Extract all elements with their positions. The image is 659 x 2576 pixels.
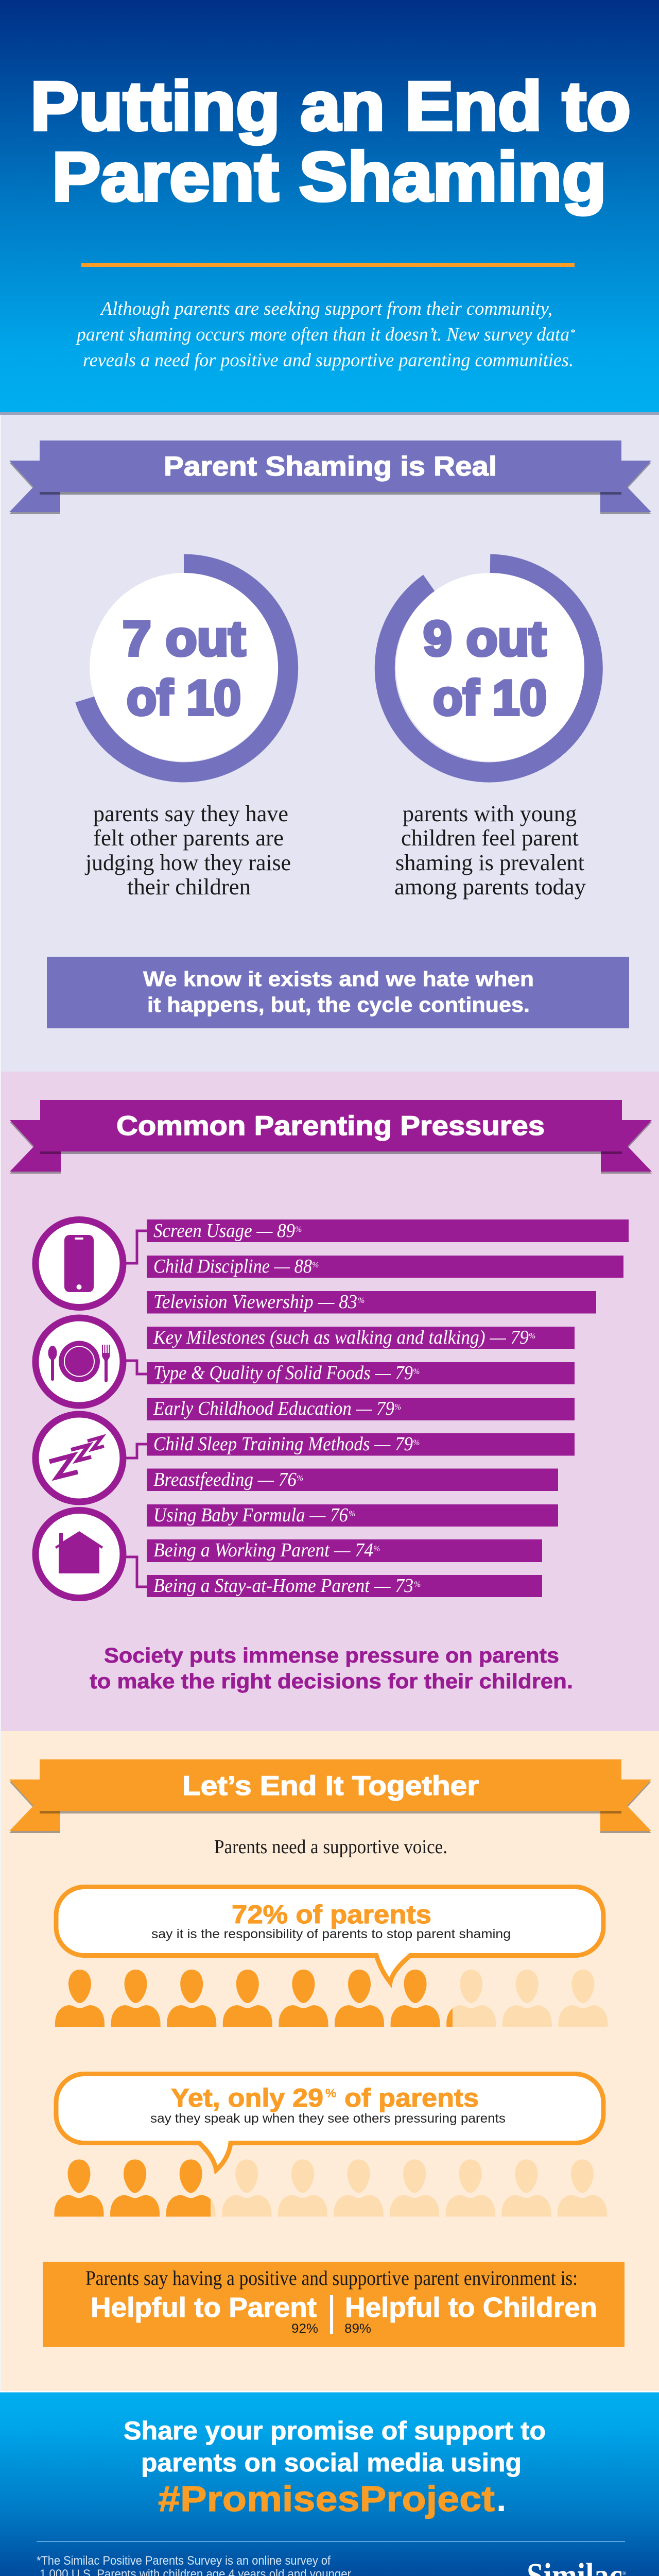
intro text: reveals a need for positive and supportive parenting communities. bbox=[83, 350, 574, 371]
speech bubble: 29% of parents: of parents bbox=[344, 2083, 479, 2112]
intro text: * bbox=[570, 327, 575, 338]
pictogram: 29 percent of parents bbox=[55, 2160, 607, 2216]
bar chart: parenting pressures bbox=[147, 1219, 629, 1597]
speech bubble: 72% of parents bbox=[56, 1887, 603, 1982]
bar: television viewership: % bbox=[358, 1296, 365, 1305]
bar: key milestones: % bbox=[529, 1332, 535, 1341]
text: pressure statement: Society puts immense pressure on parents bbox=[104, 1643, 559, 1667]
speech bubble: 29% of parents: Yet, only 29 bbox=[171, 2083, 323, 2112]
speech bubble: 72% of parents: 72% of parents bbox=[232, 1900, 431, 1929]
bar: baby formula: % bbox=[349, 1510, 355, 1518]
speech bubble: 29% of parents: % bbox=[325, 2087, 336, 2100]
bar: breastfeeding: % bbox=[297, 1474, 303, 1483]
panel: header bbox=[0, 0, 659, 412]
icon: plate and cutlery bbox=[36, 1318, 123, 1405]
bar: breastfeeding: Breastfeeding — 76 bbox=[153, 1469, 297, 1490]
text: 7 out of 10 caption: judging how they raise bbox=[84, 850, 291, 875]
bar: sleep training: % bbox=[413, 1438, 420, 1447]
speech bubble: 72% of parents: say it is the responsibility of parents to stop parent shaming bbox=[151, 1927, 511, 1941]
text: 9 out of 10 caption: among parents today bbox=[394, 874, 586, 900]
text: share your promise bbox=[124, 2416, 546, 2477]
bar: baby formula bbox=[147, 1504, 558, 1527]
donut chart: 9 out of 10: of 10 bbox=[433, 670, 547, 725]
bar: working parent: % bbox=[373, 1545, 380, 1553]
callout banner: We know it exists and we hate when bbox=[143, 967, 534, 991]
donut chart: 9 out of 10: 9 out bbox=[423, 611, 546, 666]
panel: footer call to action bbox=[0, 2391, 659, 2576]
bar: child discipline: Child Discipline — 88 bbox=[153, 1256, 312, 1277]
callout banner: it happens, but, the cycle continues. bbox=[147, 993, 530, 1016]
speech bubble: 29% of parents: say they speak up when they see others pressuring parents bbox=[150, 2111, 506, 2126]
icon: sleep zzz bbox=[36, 1414, 123, 1502]
hashtag: #PromisesProject bbox=[158, 2479, 495, 2519]
bar: sleep training: Child Sleep Training Methods — 79 bbox=[153, 1433, 413, 1455]
bar: sleep training bbox=[147, 1433, 575, 1456]
ribbon heading: common parenting pressures bbox=[10, 1100, 652, 1174]
text: 9 out of 10 caption bbox=[394, 801, 586, 900]
ribbon heading: let's end it together: Let’s End It Together bbox=[182, 1771, 479, 1801]
footnote: *The Similac Positive Parents Survey is an online survey of bbox=[37, 2554, 331, 2568]
callout: helpful to parent and children bbox=[43, 2262, 625, 2347]
bar: baby formula: Using Baby Formula — 76 bbox=[153, 1504, 348, 1526]
title: Parent Shaming bbox=[52, 139, 606, 215]
bar: breastfeeding bbox=[147, 1468, 558, 1491]
donut chart: 7 out of 10 bbox=[85, 564, 288, 772]
callout banner bbox=[47, 957, 629, 1028]
bar: stay-at-home parent: Being a Stay-at-Home Parent — 73 bbox=[153, 1575, 413, 1597]
bar: working parent bbox=[147, 1539, 542, 1562]
donut chart: 7 out of 10: of 10 bbox=[127, 670, 241, 725]
bar: stay-at-home parent: % bbox=[414, 1580, 421, 1589]
ribbon heading: parent shaming is real bbox=[9, 440, 651, 514]
callout: helpful to parent and children: 92% bbox=[291, 2321, 318, 2336]
text: supportive voice: Parents need a supportive voice. bbox=[214, 1836, 447, 1858]
footnote bbox=[37, 2554, 351, 2576]
panel: parent shaming is real bbox=[0, 412, 659, 2391]
callout: helpful to parent and children: 89% bbox=[344, 2321, 371, 2336]
text: pressure statement: to make the right decisions for their children. bbox=[90, 1669, 573, 1693]
bar: screen usage bbox=[147, 1219, 629, 1242]
pictogram: 72 percent of parents bbox=[55, 1970, 608, 2027]
bar: solid foods: Type & Quality of Solid Foods — 79 bbox=[153, 1362, 413, 1384]
intro text bbox=[75, 298, 575, 371]
panel: common parenting pressures bbox=[1, 1072, 659, 1731]
bar: screen usage: % bbox=[295, 1225, 302, 1234]
bar: early childhood education bbox=[147, 1398, 575, 1420]
ribbon heading: common parenting pressures: Common Parenting Pressures bbox=[116, 1111, 545, 1141]
bar: early childhood education: Early Childhood Education — 79 bbox=[153, 1398, 394, 1419]
text: pressure statement bbox=[90, 1643, 573, 1693]
callout: helpful to parent and children: Helpful to Children bbox=[345, 2292, 597, 2323]
hashtag: . bbox=[496, 2479, 506, 2519]
text: 7 out of 10 caption bbox=[84, 801, 291, 900]
donut chart: 9 out of 10 bbox=[385, 564, 593, 772]
bar: child discipline bbox=[147, 1256, 623, 1278]
orange divider bbox=[81, 263, 575, 267]
text: 7 out of 10 caption: felt other parents are bbox=[93, 825, 284, 851]
text: 7 out of 10 caption: their children bbox=[127, 874, 251, 900]
bar: child discipline: % bbox=[312, 1261, 319, 1269]
bar: screen usage: Screen Usage — 89 bbox=[153, 1220, 295, 1242]
callout: helpful to parent and children: Parents say having a positive and supportive parent environment is: bbox=[85, 2266, 578, 2290]
callout: helpful to parent and children: Helpful to Parent bbox=[91, 2292, 317, 2323]
text: 9 out of 10 caption: parents with young bbox=[403, 801, 577, 826]
icon: house bbox=[36, 1511, 123, 1598]
bar: early childhood education: % bbox=[394, 1403, 401, 1412]
bar: working parent: Being a Working Parent — 74 bbox=[153, 1539, 373, 1561]
bar: solid foods bbox=[147, 1362, 575, 1384]
ribbon heading: let's end it together bbox=[9, 1759, 651, 1833]
title bbox=[30, 68, 631, 215]
bar: television viewership: Television Viewership — 83 bbox=[153, 1291, 357, 1313]
ribbon heading: parent shaming is real: Parent Shaming is Real bbox=[164, 451, 497, 482]
intro text: parent shaming occurs more often than it doesn’t. New survey data bbox=[75, 324, 569, 345]
intro text: Although parents are seeking support from their community, bbox=[99, 298, 552, 319]
bar: solid foods: % bbox=[413, 1367, 420, 1376]
icon: phone bbox=[36, 1220, 123, 1308]
text: 9 out of 10 caption: shaming is prevalent bbox=[395, 850, 584, 875]
connectors bbox=[126, 1231, 147, 1587]
panel: let's end it together bbox=[1, 1731, 659, 2391]
bar: key milestones: Key Milestones (such as walking and talking) — 79 bbox=[153, 1327, 529, 1348]
title: Putting an End to bbox=[30, 68, 631, 145]
text: 9 out of 10 caption: children feel parent bbox=[401, 825, 579, 851]
bar: television viewership bbox=[147, 1291, 596, 1314]
speech bubble: 29% of parents bbox=[56, 2074, 603, 2170]
bar: stay-at-home parent bbox=[147, 1575, 542, 1597]
text: 7 out of 10 caption: parents say they have bbox=[93, 801, 288, 826]
text: share your promise: Share your promise of support to bbox=[124, 2416, 546, 2445]
donut chart: 7 out of 10: 7 out bbox=[123, 611, 246, 666]
text: share your promise: parents on social media using bbox=[141, 2448, 522, 2477]
